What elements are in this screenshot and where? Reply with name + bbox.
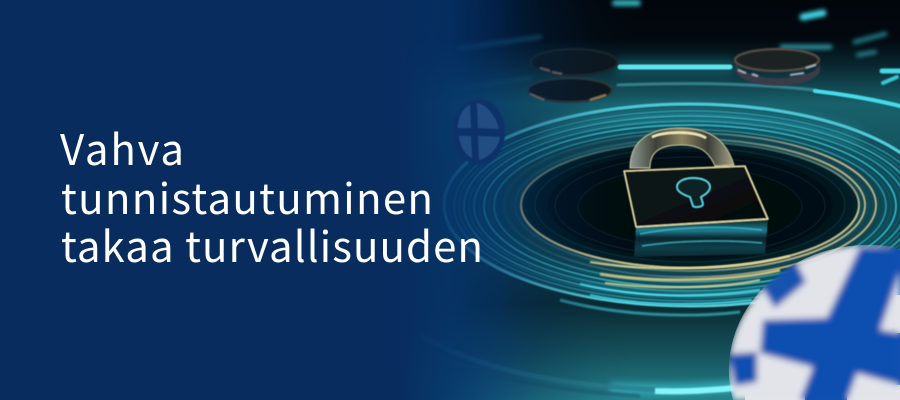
title line 1: Vahva — [60, 117, 184, 178]
title — [60, 117, 483, 275]
title line 3: takaa turvallisuuden — [61, 214, 483, 275]
far lower light ring — [420, 335, 735, 396]
chip body — [728, 245, 900, 400]
chip edge blue underlay — [805, 250, 900, 400]
chip blue cross — [760, 247, 900, 400]
blurred poker chips in the distance — [528, 49, 820, 102]
shackle highlights — [652, 133, 706, 138]
upper ring glow — [540, 113, 860, 138]
ghost chip behind the overlay — [453, 99, 505, 165]
concentric ripple rings — [444, 104, 900, 306]
padlock — [624, 128, 768, 257]
chip edge underlay — [745, 295, 900, 400]
distant glowing light streaks — [450, 3, 900, 106]
lock side — [634, 219, 768, 257]
keyhole — [677, 178, 710, 207]
title line 2: tunnistautuminen — [61, 166, 433, 227]
lock face — [624, 166, 768, 227]
lock side streaks — [640, 227, 762, 246]
photo background — [400, 0, 900, 400]
chip edge segments — [762, 260, 806, 308]
lock shackle — [630, 128, 734, 168]
finnish flag poker chip — [728, 245, 900, 400]
lock reflection in ripples — [560, 256, 790, 315]
